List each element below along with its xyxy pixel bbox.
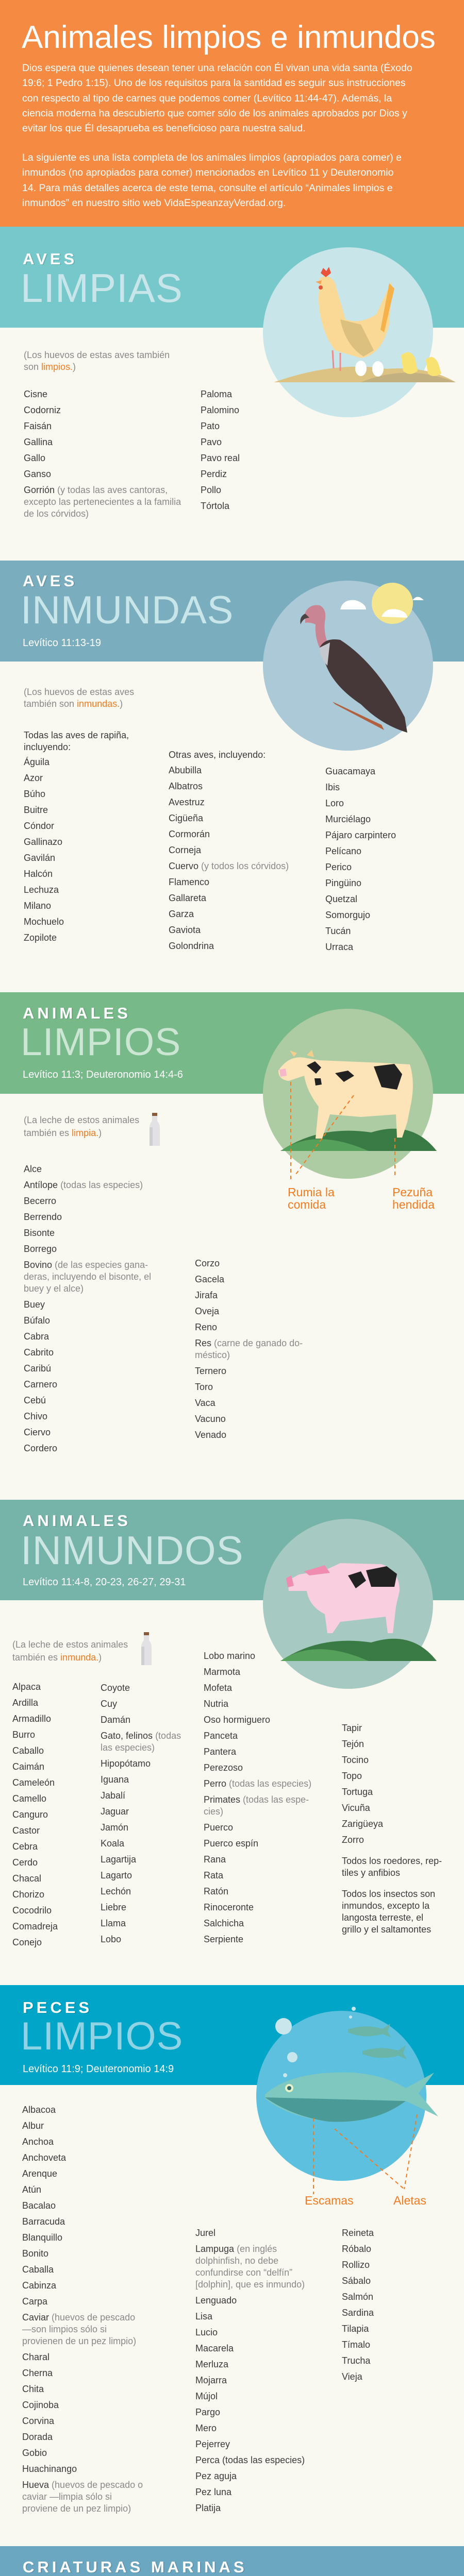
list: animales inmundos col 3: Marmota [204, 1667, 240, 1677]
note: eggs: (Los huevos de estas aves [24, 687, 134, 697]
panel: peces limpios band [0, 1985, 464, 2085]
icon: milk bottle [141, 1632, 152, 1665]
list: aves limpias col 2 [201, 389, 240, 511]
list: otras aves col 3: Ibis [325, 782, 340, 792]
list: animales inmundos col 4: tiles y anfibios [342, 1868, 400, 1878]
list: aves limpias col 1: Gallo [24, 453, 45, 463]
list: animales inmundos col 4: Tortuga [342, 1787, 373, 1797]
list: animales inmundos col 3: Nutria [204, 1699, 228, 1709]
list: animales limpios col 1: Ciervo [24, 1427, 51, 1437]
list: otras aves col 3: Pingüino [325, 878, 361, 888]
list: aves limpias col 1: Cisne [24, 389, 47, 399]
list: peces col 1: Corvina [22, 2416, 54, 2426]
list: otras aves: Abubilla [169, 765, 202, 775]
list: otras aves col 3: Tucán [325, 926, 351, 936]
list: peces col 3: Trucha [342, 2355, 370, 2366]
list: animales inmundos col 4: Zarigüeya [342, 1819, 383, 1829]
list: animales inmundos col 1: Armadillo [12, 1714, 51, 1724]
list: peces col 1: Charal [22, 2352, 49, 2362]
list: animales inmundos col 3: Pantera [204, 1747, 236, 1757]
list: peces col 2: Pez aguja [195, 2471, 237, 2481]
list: otras aves col 3: Somorgujo [325, 910, 370, 920]
list: peces col 2: Lenguado [195, 2295, 237, 2306]
list: aves limpias col 2: Tórtola [201, 501, 229, 511]
list: otras aves col 3: Perico [325, 862, 352, 872]
list: aves de rapiña: Azor [24, 773, 43, 783]
list: animales inmundos col 3: Rana [204, 1854, 226, 1865]
label: escamas: Escamas [305, 2194, 354, 2207]
list: peces col 1: Barracuda [22, 2216, 65, 2227]
label: pezuña hendida: Pezuña [392, 1185, 433, 1199]
list: peces col 3: Salmón [342, 2292, 373, 2302]
list: animales inmundos col 1: Ardilla [12, 1698, 38, 1708]
list: peces col 3: Tilapia [342, 2324, 369, 2334]
note: eggs: son limpios.) [24, 362, 76, 372]
list: otras aves: Cuervo (y todos los córvidos) [169, 861, 289, 871]
list: otras aves: Golondrina [169, 941, 214, 951]
icon: hen [263, 247, 456, 417]
note: milk [24, 1115, 139, 1138]
list: peces col 1: Chita [22, 2384, 44, 2394]
intro text [22, 62, 412, 134]
list: animales inmundos col 2: Liebre [101, 1902, 126, 1912]
list: peces col 2: Mero [195, 2423, 217, 2433]
list: animales limpios col 2: Corzo [195, 1258, 220, 1268]
list: animales limpios col 1: Buey [24, 1299, 45, 1310]
list: aves de rapiña: incluyendo: [24, 742, 71, 752]
list: animales limpios col 1: buey y el alce) [24, 1283, 84, 1294]
list: peces col 1 [22, 2105, 143, 2514]
list: animales inmundos col 2: las especies) [101, 1742, 155, 1753]
list: animales inmundos col 1: Canguro [12, 1809, 48, 1820]
list: peces col 1: Blanquillo [22, 2232, 62, 2243]
list: peces col 1: Hueva (huevos de pescado o [22, 2480, 143, 2490]
note: milk: también es inmunda.) [12, 1652, 102, 1663]
list: animales limpios col 2: Vaca [195, 1398, 216, 1408]
list: animales inmundos col 4: Topo [342, 1771, 362, 1781]
heading: inmundas: INMUNDAS [21, 588, 234, 632]
list: animales limpios col 1: Búfalo [24, 1315, 50, 1326]
heading: inmundos: INMUNDOS [21, 1528, 244, 1573]
list: animales inmundos col 3: Panceta [204, 1731, 238, 1741]
list: aves limpias col 1: Ganso [24, 469, 51, 479]
list: otras aves: Albatros [169, 781, 203, 791]
list: animales inmundos col 2: Lobo [101, 1934, 121, 1944]
list: peces col 2: Pez luna [195, 2487, 231, 2497]
list: otras aves col 3: Pájaro carpintero [325, 830, 396, 840]
list: animales inmundos col 3: Rinoceronte [204, 1902, 254, 1912]
list: peces col 1: —son limpios sólo si [22, 2324, 107, 2334]
list: animales inmundos col 3: cies) [204, 1806, 223, 1817]
list: animales limpios col 2: méstico) [195, 1350, 230, 1360]
list: aves limpias col 2: Pato [201, 421, 220, 431]
icon: cow [263, 1009, 437, 1179]
heading: AVES [23, 250, 77, 268]
list: otras aves col 3: Murciélago [325, 814, 371, 824]
list: peces col 1: Huachinango [22, 2464, 77, 2474]
list: animales inmundos col 4: Tocino [342, 1755, 369, 1765]
list: peces col 1: Bonito [22, 2248, 48, 2259]
list: animales limpios col 2: Jirafa [195, 1290, 218, 1300]
list: animales inmundos col 4: Todos los roedores, rep- [342, 1856, 442, 1866]
heading: CRIATURAS MARINAS [23, 2558, 247, 2576]
list: animales inmundos col 3: Perezoso [204, 1762, 243, 1773]
list: peces col 1: Dorada [22, 2432, 53, 2442]
reference: Levítico 11:4-8, 20-23, 26-27, 29-31 [23, 1577, 186, 1588]
intro text: con respecto al tipo de carnes que podemos comer (Levítico 11:44-47). Además, la [22, 93, 392, 104]
list: animales inmundos col 4 [342, 1723, 442, 1935]
list: otras aves col 3: Quetzal [325, 894, 357, 904]
list: otras aves: Gallareta [169, 893, 206, 903]
list: otras aves: Gaviota [169, 925, 201, 935]
intro text: evitar los que Él desaprueba es beneficioso para nuestra salud. [22, 123, 306, 134]
list: animales limpios col 1: Alce [24, 1164, 42, 1174]
list: aves de rapiña: Cóndor [24, 821, 54, 831]
list: animales limpios col 1: Bovino (de las especies gana- [24, 1260, 148, 1270]
list: animales inmundos col 1: Chorizo [12, 1889, 44, 1900]
list: animales limpios col 1 [24, 1164, 151, 1453]
list: aves limpias col 1 [24, 389, 181, 519]
list: aves limpias col 2: Pavo real [201, 453, 240, 463]
intro text: Dios espera que quienes desean tener una relación con Él vivan una vida santa (Éxodo [22, 62, 412, 74]
list: animales inmundos col 2: Koala [101, 1838, 124, 1849]
note: eggs: también son inmundas.) [24, 699, 123, 709]
intro text: ciencia moderna ha descubierto que comer sólo de los animales aprobados por Dios y [22, 108, 407, 119]
panel: animales limpios band [0, 992, 464, 1094]
list: peces col 3: Sardina [342, 2308, 374, 2318]
reference: Levítico 11:3; Deuteronomio 14:4-6 [23, 1069, 183, 1080]
list: aves de rapiña: Gavilán [24, 853, 55, 863]
list: aves limpias col 2: Paloma [201, 389, 232, 399]
label: rumia la comida: Rumia la [288, 1185, 335, 1199]
list: animales inmundos col 2: Coyote [101, 1683, 130, 1693]
list: animales inmundos col 4: inmundos, excepto la [342, 1901, 429, 1911]
intro text 2: 14. Para más detalles acerca de este tema, consulte el artículo “Animales limpios e [22, 182, 393, 194]
list: animales inmundos col 2: Cuy [101, 1699, 117, 1709]
list: aves de rapiña: Buitre [24, 805, 48, 815]
list: animales limpios col 1: Bisonte [24, 1228, 55, 1238]
list: animales inmundos col 3: Ratón [204, 1886, 228, 1896]
label: rumia la comida: comida [288, 1198, 326, 1211]
heading: limpios: LIMPIOS [21, 2014, 183, 2058]
list: peces col 3: Rollizo [342, 2260, 370, 2270]
list: peces col 1: Anchoveta [22, 2153, 66, 2163]
list: peces col 1: Cojinoba [22, 2400, 59, 2410]
icon: fish [256, 2007, 438, 2194]
list: peces col 3: Sábalo [342, 2276, 371, 2286]
list: peces col 1: proviene de un pez limpio) [22, 2503, 131, 2514]
panel: animales inmundos band [0, 1500, 464, 1600]
intro text: 19:6; 1 Pedro 1:15). Uno de los requisitos para la santidad es seguir sus instrucciones [22, 77, 406, 89]
list: animales limpios col 2: Oveja [195, 1306, 219, 1316]
list: animales limpios col 1: Carnero [24, 1379, 57, 1389]
list: animales inmundos col 1: Caimán [12, 1761, 44, 1772]
list: animales inmundos col 1 [12, 1682, 58, 1947]
heading: ANIMALES [23, 1004, 131, 1022]
list: animales inmundos col 2 [101, 1683, 181, 1944]
list: animales inmundos col 4: Tapir [342, 1723, 362, 1733]
note: milk: (La leche de estos animales [24, 1115, 139, 1125]
list: peces col 3: Róbalo [342, 2244, 371, 2254]
list: animales limpios col 1: Becerro [24, 1196, 56, 1206]
list: peces col 1: Bacalao [22, 2200, 56, 2211]
list: peces col 2: Lisa [195, 2311, 212, 2321]
list: aves de rapiña: Búho [24, 789, 45, 799]
list: peces col 3: Reineta [342, 2228, 374, 2238]
list: animales limpios col 1: Berrendo [24, 1212, 62, 1222]
list: animales limpios col 1: deras, incluyendo el bisonte, el [24, 1272, 151, 1282]
list: peces col 2: Mojarra [195, 2375, 227, 2385]
list: aves limpias col 2: Perdiz [201, 469, 227, 479]
list: peces col 2: Perca (todas las especies) [195, 2455, 305, 2465]
list: animales inmundos col 4: Todos los insectos son [342, 1889, 435, 1899]
list: animales inmundos col 3 [204, 1651, 311, 1944]
list: otras aves: Otras aves, incluyendo: [169, 750, 266, 760]
list: animales limpios col 1: Cabrito [24, 1347, 54, 1358]
label: pezuña hendida: hendida [392, 1198, 435, 1211]
list: otras aves: Corneja [169, 845, 201, 855]
list: peces col 2: Jurel [195, 2228, 216, 2238]
list: peces col 2: Platija [195, 2503, 221, 2513]
list: animales inmundos col 2: Jaguar [101, 1806, 129, 1817]
list: peces col 1: Arenque [22, 2168, 57, 2179]
list: peces col 2: Macarela [195, 2343, 234, 2353]
list: otras aves col 3: Pelícano [325, 846, 361, 856]
list: otras aves: Cormorán [169, 829, 210, 839]
intro text 2 [22, 152, 402, 209]
list: animales inmundos col 3: Lobo marino [204, 1651, 255, 1661]
list: peces col 1: Cabinza [22, 2280, 56, 2291]
list: peces col 1: provienen de un pez limpio) [22, 2336, 136, 2346]
list: otras aves: Cigüeña [169, 813, 203, 823]
note: eggs [24, 687, 134, 709]
list: animales inmundos col 3: Oso hormiguero [204, 1715, 270, 1725]
list: aves limpias col 1: excepto las pertenecientes a la familia [24, 497, 181, 507]
list: animales limpios col 1: Chivo [24, 1411, 47, 1421]
list: animales inmundos col 3: Mofeta [204, 1683, 232, 1693]
list: aves de rapiña: Zopilote [24, 933, 57, 943]
list: peces col 1: Carpa [22, 2296, 47, 2307]
list: animales limpios col 2: Vacuno [195, 1414, 226, 1424]
list: animales inmundos col 1: Cerdo [12, 1857, 38, 1868]
list: otras aves col 3: Urraca [325, 942, 353, 952]
list: animales inmundos col 2: Gato, felinos (todas [101, 1731, 181, 1741]
icon: vulture [263, 581, 433, 751]
list: animales inmundos col 4: grillo y el saltamontes [342, 1924, 431, 1935]
list: animales inmundos col 1: Caballo [12, 1745, 44, 1756]
list: peces col 2: Mújol [195, 2391, 218, 2401]
note: eggs: (Los huevos de estas aves también [24, 350, 170, 360]
list: animales inmundos col 2: Iguana [101, 1774, 129, 1785]
list: aves limpias col 1: de los córvidos) [24, 509, 89, 519]
list: peces col 1: Atún [22, 2184, 41, 2195]
list: animales inmundos col 4: Tejón [342, 1739, 364, 1749]
list: peces col 1: Caviar (huevos de pescado [22, 2312, 135, 2323]
intro text 2: La siguiente es una lista completa de los animales limpios (apropiados para comer) e [22, 152, 402, 163]
list: otras aves: Flamenco [169, 877, 209, 887]
list: animales limpios col 2: Venado [195, 1430, 226, 1440]
list: animales inmundos col 2: Llama [101, 1918, 126, 1928]
list: animales limpios col 1: Borrego [24, 1244, 57, 1254]
list: aves limpias col 1: Gallina [24, 437, 53, 447]
list: animales inmundos col 3: Salchicha [204, 1918, 244, 1928]
list: otras aves col 3: Guacamaya [325, 766, 375, 776]
list: animales inmundos col 1: Burro [12, 1730, 35, 1740]
list: animales inmundos col 1: Alpaca [12, 1682, 41, 1692]
list: animales inmundos col 2: Hipopótamo [101, 1758, 151, 1769]
note: milk: (La leche de estos animales [12, 1639, 128, 1650]
header panel [0, 0, 464, 227]
list: peces col 2: [dolphin], que es inmundo) [195, 2279, 305, 2290]
list: peces col 2: Merluza [195, 2359, 228, 2369]
list: animales inmundos col 1: Castor [12, 1825, 40, 1836]
list: animales inmundos col 4: Zorro [342, 1835, 364, 1845]
list: animales inmundos col 2: Lechón [101, 1886, 131, 1896]
list: animales inmundos col 3: Serpiente [204, 1934, 243, 1944]
list: animales limpios col 1: Antílope (todas las especies) [24, 1180, 143, 1190]
label: rumia la comida [288, 1185, 335, 1211]
list: aves de rapiña: Águila [24, 757, 49, 767]
note: eggs [24, 350, 170, 372]
list: animales inmundos col 3: Puerco espín [204, 1838, 258, 1849]
list: otras aves col 3 [325, 766, 396, 952]
list: animales limpios col 2: Res (carne de ganado do- [195, 1338, 303, 1348]
list: animales inmundos col 2: Damán [101, 1715, 130, 1725]
list: peces col 2: Lampuga (en inglés [195, 2244, 277, 2254]
list: aves de rapiña: Todas las aves de rapiña, [24, 730, 129, 740]
list: animales inmundos col 4: langosta terreste, el [342, 1912, 423, 1923]
heading: ANIMALES [23, 1512, 131, 1530]
list: aves de rapiña: Mochuelo [24, 917, 64, 927]
list: animales inmundos col 3: Primates (todas las espe- [204, 1794, 309, 1805]
list: peces col 3: Vieja [342, 2371, 362, 2382]
list: animales limpios col 1: Caribú [24, 1363, 51, 1374]
list: aves limpias col 2: Pollo [201, 485, 221, 495]
list: aves de rapiña: Halcón [24, 869, 53, 879]
heading: limpios: LIMPIOS [21, 1020, 181, 1063]
list: peces col 3 [342, 2228, 374, 2382]
list: otras aves [169, 750, 289, 951]
list: aves limpias col 1: Gorrión (y todas las aves cantoras, [24, 485, 168, 495]
panel: aves limpias band [0, 227, 464, 328]
label: aletas: Aletas [393, 2194, 426, 2207]
list: animales limpios col 2: Gacela [195, 1274, 224, 1284]
list: aves de rapiña: Lechuza [24, 885, 59, 895]
list: peces col 1: Caballa [22, 2264, 54, 2275]
panel: aves inmundas band [0, 561, 464, 662]
list: aves limpias col 2: Palomino [201, 405, 239, 415]
reference: Levítico 11:9; Deuteronomio 14:9 [23, 2063, 174, 2075]
list: animales inmundos col 2: Lagartija [101, 1854, 136, 1865]
list: animales limpios col 1: Cabra [24, 1331, 49, 1342]
list: peces col 2: dolphinfish, no debe [195, 2256, 278, 2266]
list: aves de rapiña [24, 730, 129, 943]
list: animales inmundos col 1: Camello [12, 1793, 46, 1804]
list: animales inmundos col 2: Jabalí [101, 1790, 125, 1801]
list: aves limpias col 2: Pavo [201, 437, 222, 447]
list: animales inmundos col 4: Vicuña [342, 1803, 370, 1813]
list: peces col 1: Gobio [22, 2448, 47, 2458]
list: animales inmundos col 2: Lagarto [101, 1870, 132, 1880]
list: aves de rapiña: Milano [24, 901, 51, 911]
list: peces col 2: Lucio [195, 2327, 218, 2337]
list: animales inmundos col 1: Cocodrilo [12, 1905, 52, 1916]
list: peces col 1: caviar —limpia sólo si [22, 2492, 112, 2502]
list: peces col 1: Albacoa [22, 2105, 56, 2115]
list: animales inmundos col 1: Chacal [12, 1873, 41, 1884]
list: animales limpios col 2: Ternero [195, 1366, 226, 1376]
title: Animales limpios e inmundos [22, 20, 436, 55]
intro text 2: inmundos (no apropiados para comer) mencionados en Levítico 11 y Deuteronomio [22, 167, 393, 178]
list: animales inmundos col 3: Rata [204, 1870, 223, 1880]
list: peces col 1: Cherna [22, 2368, 53, 2378]
reference: Levítico 11:13-19 [23, 637, 101, 649]
list: peces col 3: Tímalo [342, 2340, 370, 2350]
list: aves limpias col 1: Faisán [24, 421, 52, 431]
list: animales limpios col 1: Cebú [24, 1395, 46, 1405]
note: milk [12, 1639, 128, 1663]
list: otras aves: Garza [169, 909, 194, 919]
list: peces col 2: Pargo [195, 2407, 220, 2417]
list: animales inmundos col 1: Conejo [12, 1937, 42, 1947]
list: aves limpias col 1: Codorniz [24, 405, 61, 415]
list: peces col 2: confundirse con “delfín” [195, 2267, 292, 2278]
list: animales inmundos col 1: Comadreja [12, 1921, 58, 1931]
list: animales limpios col 2 [195, 1258, 303, 1440]
heading: AVES [23, 572, 77, 590]
icon: pig [263, 1519, 437, 1689]
heading: limpias: LIMPIAS [21, 265, 183, 311]
list: animales limpios col 2: Toro [195, 1382, 213, 1392]
icon: milk bottle [150, 1113, 160, 1146]
label: pezuña hendida [392, 1185, 435, 1211]
intro text 2: inmundos” en nuestro sitio web VidaEspeanzayVerdad.org. [22, 197, 286, 209]
list: peces col 1: Anchoa [22, 2137, 54, 2147]
list: aves de rapiña: Gallinazo [24, 837, 62, 847]
list: animales limpios col 2: Reno [195, 1322, 217, 1332]
list: animales inmundos col 3: Puerco [204, 1822, 233, 1833]
list: otras aves: Avestruz [169, 797, 205, 807]
list: animales inmundos col 1: Cebra [12, 1841, 38, 1852]
list: animales inmundos col 1: Cameleón [12, 1777, 55, 1788]
panel: criaturas marinas band [0, 2546, 464, 2576]
list: peces col 2: Pejerrey [195, 2439, 230, 2449]
heading: PECES [23, 1998, 92, 2016]
note: milk: también es limpia.) [24, 1128, 102, 1138]
list: animales inmundos col 3: Perro (todas las especies) [204, 1778, 311, 1789]
list: peces col 1: Albur [22, 2121, 44, 2131]
list: otras aves col 3: Loro [325, 798, 344, 808]
list: animales limpios col 1: Cordero [24, 1443, 57, 1453]
list: animales inmundos col 2: Jamón [101, 1822, 128, 1833]
list: peces col 2 [195, 2228, 305, 2513]
